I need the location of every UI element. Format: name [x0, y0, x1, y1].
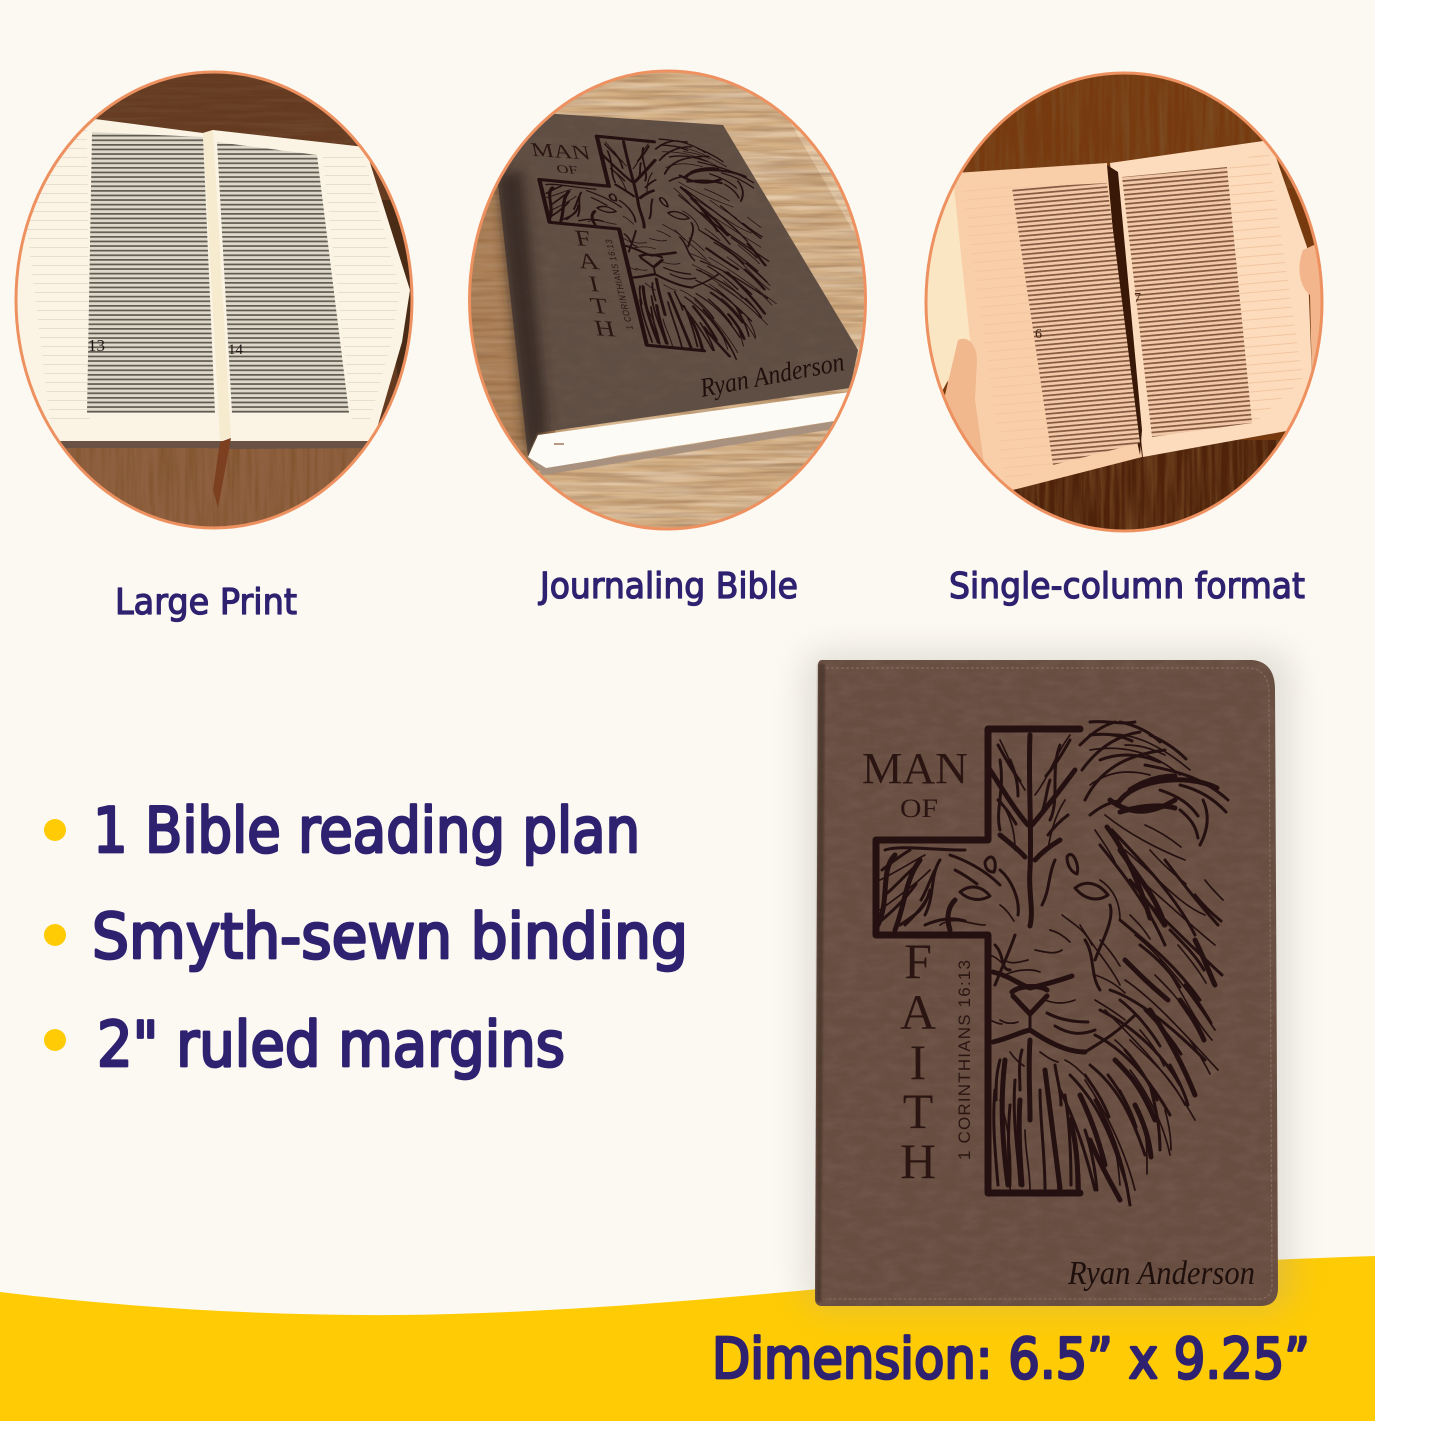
cover title: man of faith: A: [900, 984, 936, 1040]
caption: large print: Large Print: [115, 582, 297, 623]
cover lettering on angled book: OF: [555, 162, 579, 177]
photo: large print open bible: 13: [88, 336, 105, 355]
lion artwork on angled book: [537, 134, 777, 360]
cover title: man of faith: [862, 744, 968, 1189]
photo: large print open bible: 14: [228, 342, 244, 358]
cover title: man of faith: H: [900, 1133, 936, 1189]
cover title: man of faith: I: [910, 1034, 926, 1090]
photo: journaling bible cover on wood: [465, 65, 870, 535]
cover lettering on angled book: [530, 143, 633, 336]
cover title: man of faith: MAN: [862, 744, 968, 793]
personalised name: Ryan Anderson: [1067, 1255, 1255, 1292]
verse reference: 1 CORINTHIANS 16:13: [955, 960, 974, 1160]
cover shadow: [803, 650, 1293, 1310]
cross and lion artwork: [876, 722, 1228, 1205]
photo: journaling bible cover on wood: Ryan Anderson: [697, 346, 847, 403]
bullet: reading plan: 1 Bible reading plan: [93, 794, 640, 867]
caption: single-column format: Single-column format: [949, 566, 1305, 607]
photo: single-column format open bible held in hands: 6: [1035, 327, 1042, 342]
dimension label: Dimension: 6.5” x 9.25”: [712, 1327, 1310, 1392]
cover lettering on angled book: H: [592, 315, 618, 342]
caption: journaling bible: Journaling Bible: [538, 566, 798, 607]
photo: single-column format open bible held in hands: 7: [1134, 291, 1141, 306]
cover lettering on angled book: A: [575, 248, 602, 275]
large bible cover: [815, 660, 1278, 1306]
cover lettering on angled book: 1 CORINTHIANS 16:13: [603, 239, 635, 330]
bullet: binding: Smyth-sewn binding: [92, 900, 688, 973]
photo: large print open bible: [10, 65, 420, 535]
cover lettering on angled book: T: [588, 292, 611, 319]
cover lettering on angled book: MAN: [529, 138, 592, 164]
yellow wave band: [0, 1256, 1375, 1421]
photo: single-column format open bible held in hands: [920, 68, 1330, 538]
bullet: margins: 2" ruled margins: [97, 1008, 565, 1081]
cover title: man of faith: T: [903, 1083, 933, 1139]
cover title: man of faith: OF: [900, 794, 938, 823]
cover lettering on angled book: I: [586, 271, 602, 297]
cover lettering on angled book: F: [572, 225, 594, 252]
cover title: man of faith: F: [904, 933, 932, 989]
